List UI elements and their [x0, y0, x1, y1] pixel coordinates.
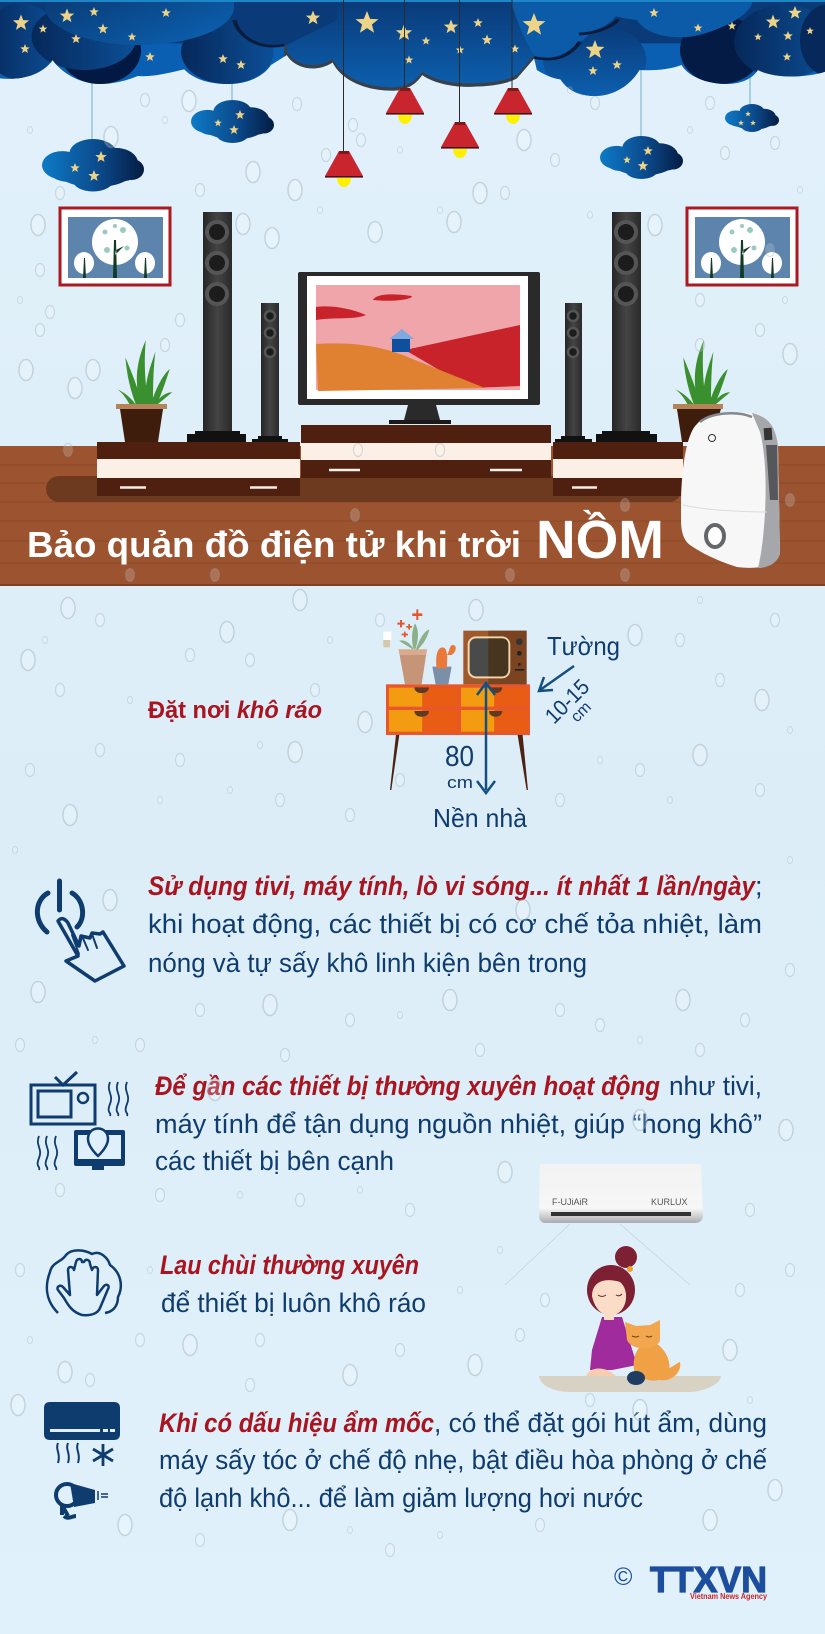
- text block: Để gần các thiết bị thường xuyên hoạt động: [155, 1071, 660, 1101]
- icon: tv and monitor with heat waves: [31, 1072, 128, 1170]
- tip 2: use devices daily: [37, 871, 763, 981]
- tip 3: place near active devices: các thiết bị bên cạnh: [155, 1146, 394, 1176]
- text block: Khi có dấu hiệu ẩm mốc: [159, 1408, 434, 1438]
- pendant lamps: [325, 0, 532, 187]
- air conditioner illustration: KURLUX: [651, 1197, 688, 1207]
- measurement labels: cm: [447, 773, 473, 792]
- tip 3: place near active devices: như tivi,: [669, 1071, 762, 1101]
- text block: Sử dụng tivi, máy tính, lò vi sóng... ít nhất 1 lần/ngày: [148, 871, 757, 901]
- hanging small clouds: [42, 70, 779, 192]
- tip 3: place near active devices: máy tính để tận dụng nguồn nhiệt, giúp “hong khô”: [155, 1109, 762, 1139]
- speakers: [187, 212, 657, 443]
- sideboard illustration with measurements: [383, 609, 530, 790]
- television: [298, 272, 540, 424]
- tip 1: dry place: Đặt nơi khô ráo: [148, 697, 322, 724]
- title: Bảo quản đồ điện tử khi trời: [27, 524, 521, 565]
- wooden floor: [0, 446, 825, 586]
- tip 5: signs of mould: máy sấy tóc ở chế độ nhẹ, bật điều hòa phòng ở chế: [159, 1445, 767, 1475]
- air conditioner illustration: F-UJiAiR: [552, 1197, 588, 1207]
- dehumidifier: [681, 412, 780, 568]
- tip 2: use devices daily: khi hoạt động, các thiết bị có cơ chế tỏa nhiệt, làm: [148, 909, 762, 939]
- measurement labels: [433, 631, 620, 833]
- icon: hand wiping: [47, 1250, 121, 1315]
- measurement labels: Nền nhà: [433, 803, 528, 833]
- text block: Lau chùi thường xuyên: [160, 1250, 419, 1280]
- title: [27, 510, 664, 570]
- tip 3: place near active devices: [31, 1071, 762, 1176]
- measurement labels: 10-15: [540, 674, 594, 729]
- tv cabinet: [46, 425, 683, 502]
- cloud ceiling: [0, 0, 825, 97]
- measurement labels: Tường: [547, 631, 620, 661]
- tip 5: signs of mould: độ lạnh khô... để làm giảm lượng hơi nước: [159, 1483, 643, 1513]
- tip 4: clean regularly: để thiết bị luôn khô ráo: [161, 1288, 426, 1318]
- tip 4: clean regularly: [47, 1250, 426, 1318]
- tip 5: signs of mould: [44, 1402, 767, 1518]
- icon: power button with hand: [37, 881, 124, 981]
- stars: [13, 6, 814, 181]
- framed pictures: [60, 208, 797, 285]
- air conditioner illustration: [505, 1164, 703, 1285]
- girl with cat illustration: [539, 1246, 721, 1392]
- tip 2: use devices daily: nóng và tự sấy khô linh kiện bên trong: [148, 948, 587, 978]
- logo: TTXVN: Vietnam News Agency: [690, 1591, 767, 1601]
- measurement labels: cm: [568, 699, 595, 726]
- measurement labels: 80: [445, 741, 474, 773]
- logo: TTXVN: TTXVN: [650, 1559, 767, 1600]
- tip 2: use devices daily: ;: [755, 871, 763, 901]
- icon: air conditioner and hair dryer: [44, 1402, 120, 1518]
- potted plants: [116, 340, 730, 442]
- tip 1: dry place: [148, 609, 620, 833]
- title: NỒM: [536, 510, 664, 570]
- tip 5: signs of mould: , có thể đặt gói hút ẩm, dùng: [434, 1408, 767, 1438]
- logo: TTXVN: ©: [614, 1563, 633, 1591]
- height arrow: [477, 683, 495, 793]
- wall arrow: [539, 666, 574, 691]
